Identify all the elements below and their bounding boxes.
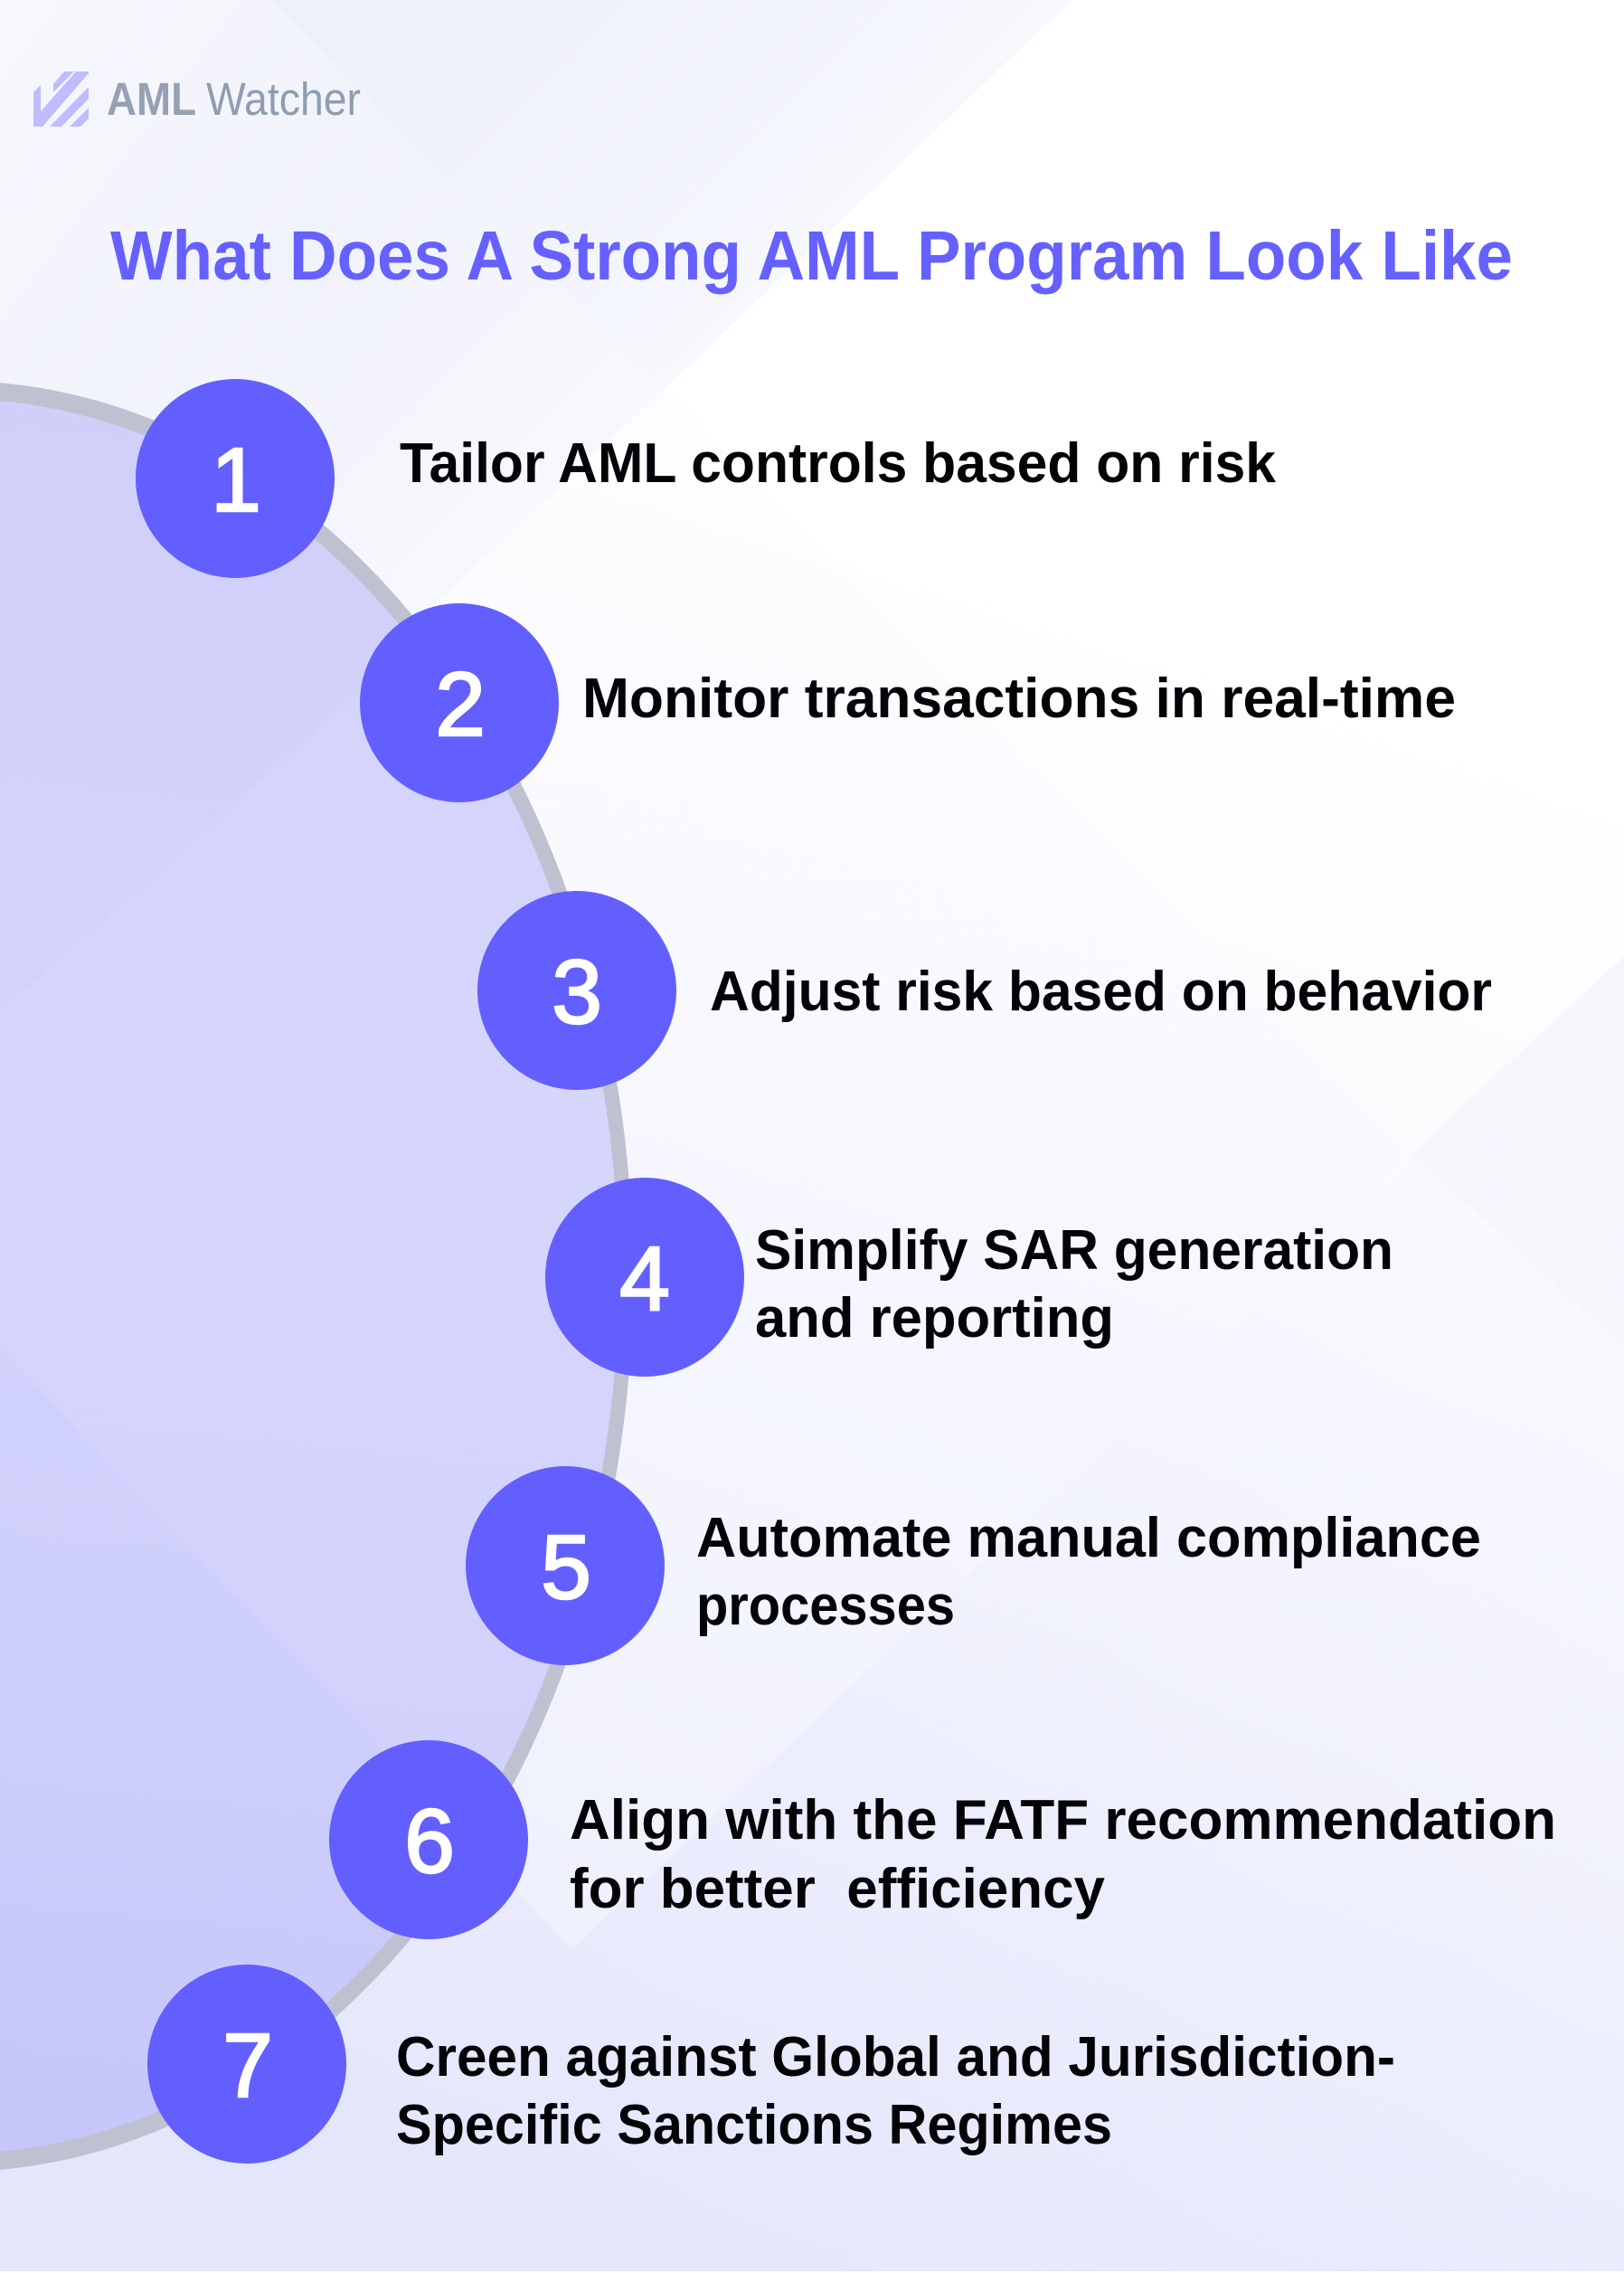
step 4: Simplify SAR generation [755, 1219, 1393, 1282]
step 2: Monitor transactions in real-time [582, 668, 1456, 730]
step 3: Adjust risk based on behavior [710, 961, 1492, 1023]
step 1 [136, 379, 1277, 578]
step 6 [329, 1740, 1556, 1939]
step 3 [477, 891, 1492, 1090]
step 6: 6 [404, 1791, 455, 1892]
step 4 [545, 1178, 1393, 1377]
step 2 [360, 603, 1456, 802]
logo wordmark: Watcher [206, 73, 361, 125]
timeline arc and disc [0, 383, 629, 2170]
step 6: Align with the FATF recommendation [570, 1789, 1556, 1852]
step 5 [466, 1466, 1481, 1665]
step 7: Specific Sanctions Regimes [396, 2094, 1112, 2156]
step 6: for better efficiency [570, 1858, 1106, 1920]
step 2: 2 [435, 654, 486, 755]
step 4: and reporting [755, 1287, 1114, 1350]
step 1: 1 [211, 430, 261, 531]
step 7 [147, 1965, 1395, 2164]
step 7: Creen against Global and Jurisdiction- [396, 2026, 1395, 2088]
step 7: 7 [222, 2015, 273, 2117]
step 5: 5 [541, 1517, 591, 1618]
logo: AML Watcher [33, 71, 361, 127]
logo icon [33, 71, 89, 127]
logo wordmark [107, 73, 361, 125]
logo wordmark: AML [107, 73, 196, 125]
step 5: processes [696, 1575, 955, 1637]
step 5: Automate manual compliance [696, 1507, 1481, 1569]
step 3: 3 [552, 942, 602, 1043]
step 4: 4 [619, 1228, 670, 1330]
step 1: Tailor AML controls based on risk [400, 432, 1277, 495]
title: What Does A Strong AML Program Look Like [110, 217, 1513, 295]
